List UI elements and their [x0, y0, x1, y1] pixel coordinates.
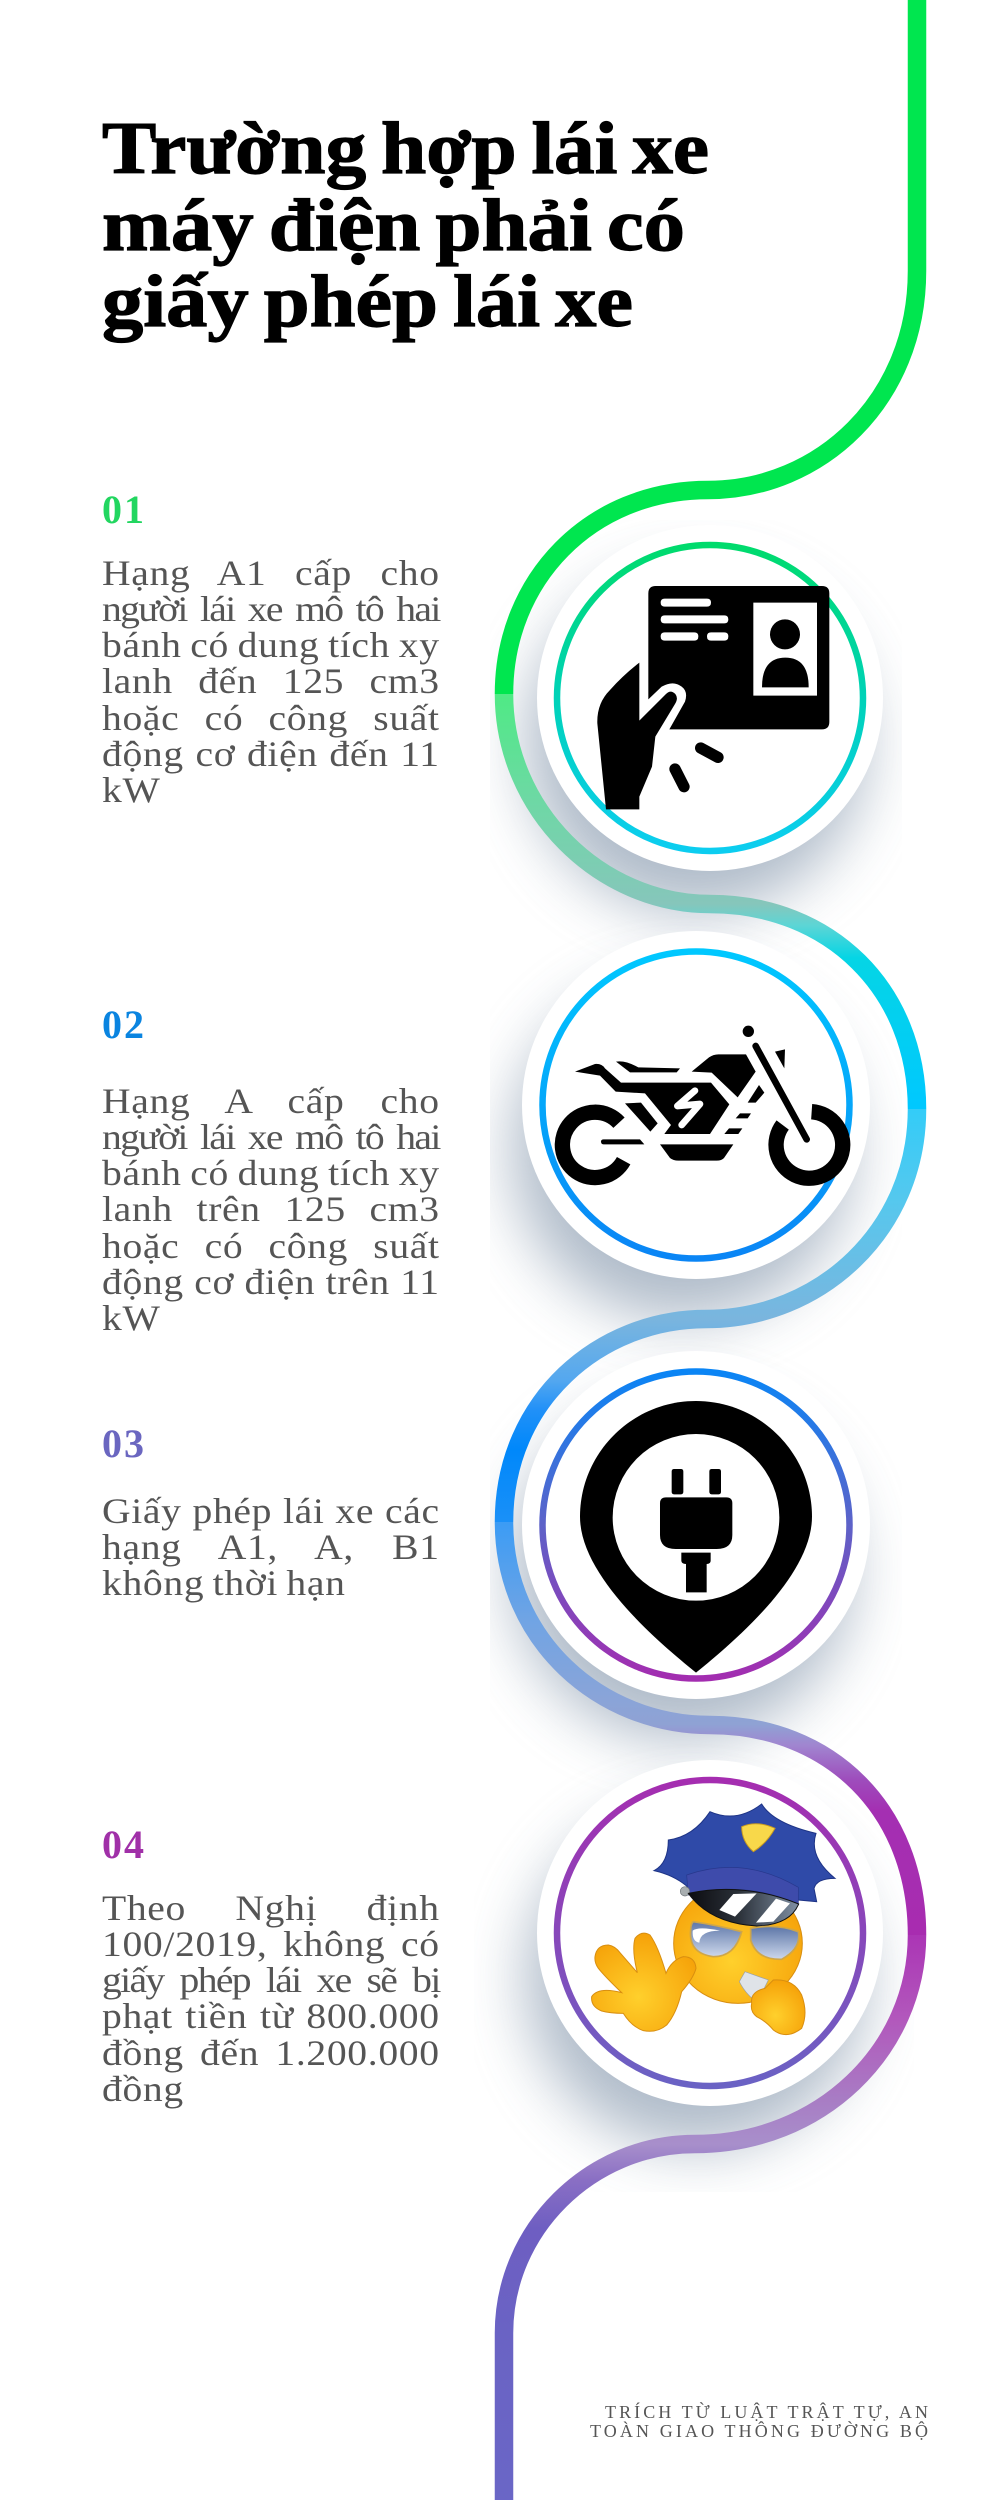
icon: police officer emoji [592, 1804, 835, 2035]
text 03 [102, 1491, 440, 1603]
text 04 [102, 1888, 441, 2109]
shadow: circle 2 [512, 980, 852, 1320]
text 03: không thời hạn [102, 1563, 346, 1603]
text 04: đồng đến 1.200.000 [102, 2033, 440, 2073]
text 04: 100/2019, không có [102, 1924, 440, 1964]
source note: TOÀN GIAO THÔNG ĐƯỜNG BỘ [590, 2420, 928, 2441]
text 03: hạng A1, A, B1 [102, 1527, 440, 1567]
text 01 [102, 553, 441, 810]
text 01: Hạng A1 cấp cho [102, 553, 440, 593]
text 02: Hạng A cấp cho [102, 1081, 440, 1121]
shadow: circle 1 [526, 573, 866, 913]
icon: electric motorbike [562, 1026, 843, 1178]
text 01: hoặc có công suất [102, 698, 440, 738]
text 01: bánh có dung tích xy [102, 625, 440, 665]
text 04: phạt tiền từ 800.000 [102, 1996, 440, 2036]
title [102, 108, 709, 343]
text 02: lanh trên 125 cm3 [102, 1189, 440, 1229]
number 02: 02 [102, 1002, 146, 1046]
circle 4: police emoji [537, 1760, 883, 2106]
text 02 [102, 1081, 441, 1338]
title: giấy phép lái xe [102, 261, 633, 343]
text 02: bánh có dung tích xy [102, 1153, 440, 1193]
panel: item 01 [102, 486, 441, 810]
text 01: động cơ điện đến 11 [102, 734, 440, 774]
number 04: 04 [102, 1822, 146, 1866]
text 04: đồng [102, 2069, 184, 2109]
text 01: người lái xe mô tô hai [102, 589, 440, 629]
number 01: 01 [102, 486, 146, 532]
circle 3: charging pin [522, 1351, 870, 1699]
text 03: Giấy phép lái xe các [102, 1491, 440, 1531]
number 03: 03 [102, 1420, 146, 1466]
text 01: lanh đến 125 cm3 [102, 661, 440, 701]
shadow: circle 3 [512, 1400, 852, 1740]
circle 2: motorbike [522, 931, 870, 1279]
source note: TRÍCH TỪ LUẬT TRẬT TỰ, AN [605, 2401, 928, 2422]
source note [590, 2401, 928, 2441]
title: Trường hợp lái xe [102, 108, 709, 190]
panel: item 04 [102, 1822, 441, 2109]
text 02: động cơ điện trên 11 [102, 1262, 440, 1302]
icon: hand holding licence card [597, 586, 829, 809]
icon: map pin with plug [580, 1401, 812, 1673]
panel: item 02 [102, 1002, 441, 1338]
text 02: hoặc có công suất [102, 1226, 440, 1266]
text 01: kW [102, 770, 161, 810]
text 04: Theo Nghị định [102, 1888, 440, 1928]
text 04: giấy phép lái xe sẽ bị [102, 1960, 440, 2000]
text 02: người lái xe mô tô hai [102, 1117, 440, 1157]
circle 1: licence card [537, 525, 883, 871]
road: winding gradient path [504, 0, 917, 2500]
text 02: kW [102, 1298, 161, 1338]
shadow: circle 4 [526, 1808, 866, 2148]
title: máy điện phải có [102, 185, 685, 267]
panel: item 03 [102, 1420, 440, 1603]
